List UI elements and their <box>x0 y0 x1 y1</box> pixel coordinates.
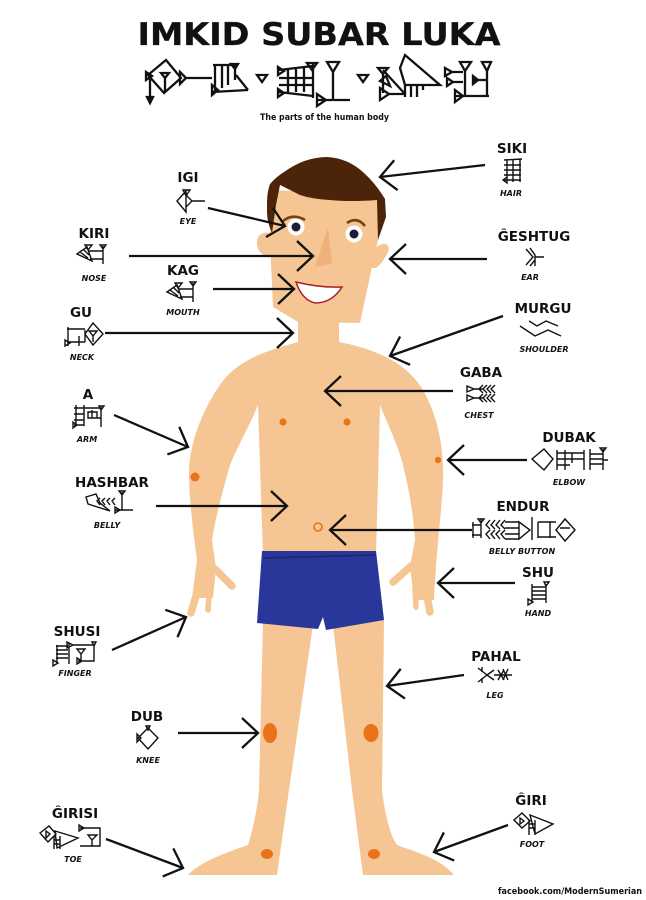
right eye <box>346 226 362 242</box>
label: HASHBAR belly: BELLY <box>94 521 121 530</box>
label: SHUSI finger <box>53 624 100 678</box>
nose <box>315 227 332 267</box>
legs and feet <box>188 620 454 875</box>
label: PAHAL leg: LEG <box>486 691 504 700</box>
label: GESHTUG ear <box>498 227 570 282</box>
left ear <box>257 232 272 256</box>
label: GU neck: GU <box>70 305 92 321</box>
arrow: foot <box>434 825 508 852</box>
label: DUB knee <box>131 709 163 765</box>
left eye <box>288 218 304 236</box>
label: A arm: ARM <box>76 435 97 444</box>
arrow: belly button <box>330 529 472 531</box>
label: SIKI hair: SIKI <box>497 141 527 157</box>
label: DUBAK elbow: ELBOW <box>553 478 586 487</box>
arrow: hair <box>380 165 485 177</box>
mouth <box>296 282 342 303</box>
label: DUB knee: DUB <box>131 709 163 725</box>
arrow: knee <box>178 732 258 734</box>
label: DUBAK elbow: DUBAK <box>542 430 596 446</box>
arrow: toe <box>106 839 183 868</box>
label: GABA chest: CHEST <box>464 411 494 420</box>
label: KIRI nose: KIRI <box>79 226 109 242</box>
label: SHUSI finger: SHUSI <box>54 624 100 640</box>
label: SIKI hair <box>497 141 527 198</box>
label: GABA chest <box>460 365 503 420</box>
label: PAHAL leg <box>471 649 521 700</box>
label: DUBAK elbow <box>532 430 608 487</box>
label: KAG mouth: MOUTH <box>166 308 200 317</box>
arrow: elbow <box>448 459 527 461</box>
label: GU neck <box>65 305 103 362</box>
label: SIKI hair: HAIR <box>500 189 522 198</box>
cuneiform title line <box>146 55 491 106</box>
figure: human body <box>188 157 454 875</box>
label: IGI eye: EYE <box>180 217 197 226</box>
label: ENDUR belly button <box>472 499 575 556</box>
head <box>270 190 378 323</box>
label: KAG mouth <box>166 263 200 317</box>
arrow: chest <box>325 390 453 392</box>
label: SHU hand <box>522 565 554 618</box>
label: ENDUR belly button: BELLY BUTTON <box>489 547 555 556</box>
label: GU neck: NECK <box>70 353 95 362</box>
waistband <box>263 555 375 558</box>
subtitle: The parts of the human body <box>260 113 389 123</box>
label: KAG mouth: KAG <box>167 263 199 279</box>
label: KIRI nose: NOSE <box>82 274 107 283</box>
joint dots <box>190 418 441 859</box>
arrow: arm <box>114 415 188 447</box>
label: MURGU shoulder: SHOULDER <box>519 345 569 354</box>
label: GESHTUG ear: ĜESHTUG <box>498 227 570 245</box>
arrow: leg <box>387 675 464 686</box>
arrow: belly <box>156 505 287 507</box>
label: GIRISI toe: TOE <box>64 855 82 864</box>
label: GIRISI toe <box>40 804 100 864</box>
label: SHU hand: SHU <box>522 565 554 581</box>
right ear <box>371 244 389 268</box>
label: IGI eye: IGI <box>177 170 199 186</box>
label: GIRI foot <box>514 791 553 849</box>
fingers <box>191 566 430 613</box>
label: GABA chest: GABA <box>460 365 503 381</box>
arrow: eye <box>208 208 285 226</box>
title: IMKID SUBAR LUKA <box>138 17 500 53</box>
arrow: finger <box>112 617 186 650</box>
label: MURGU shoulder: MURGU <box>515 301 571 317</box>
label: GIRI foot: FOOT <box>520 840 545 849</box>
belly button <box>314 523 322 531</box>
label: DUB knee: KNEE <box>136 756 160 765</box>
shorts <box>257 551 384 630</box>
arrow: mouth <box>213 288 294 290</box>
arrow: shoulder <box>390 316 503 356</box>
eyebrows <box>283 217 365 226</box>
arrow: hand <box>438 582 515 584</box>
arrow: neck <box>105 332 293 334</box>
label: GIRISI toe: ĜIRISI <box>52 804 98 822</box>
label: HASHBAR belly: HASHBAR <box>75 475 150 491</box>
small fingers <box>208 588 416 610</box>
label: SHUSI finger: FINGER <box>58 669 92 678</box>
label: A arm: A <box>83 387 94 403</box>
label: PAHAL leg: PAHAL <box>471 649 521 665</box>
body skin <box>189 318 443 600</box>
label: SHU hand: HAND <box>525 609 551 618</box>
label: IGI eye <box>177 170 205 226</box>
arrow: nose <box>129 255 313 257</box>
hair <box>267 157 386 240</box>
label: A arm <box>73 387 104 444</box>
label: HASHBAR belly <box>75 475 150 530</box>
label: KIRI nose <box>77 226 109 283</box>
label: GIRI foot: ĜIRI <box>515 791 547 809</box>
arrow: ear <box>390 258 487 260</box>
label: GESHTUG ear: EAR <box>521 273 539 282</box>
label: ENDUR belly button: ENDUR <box>496 499 550 515</box>
label: MURGU shoulder <box>515 301 571 354</box>
